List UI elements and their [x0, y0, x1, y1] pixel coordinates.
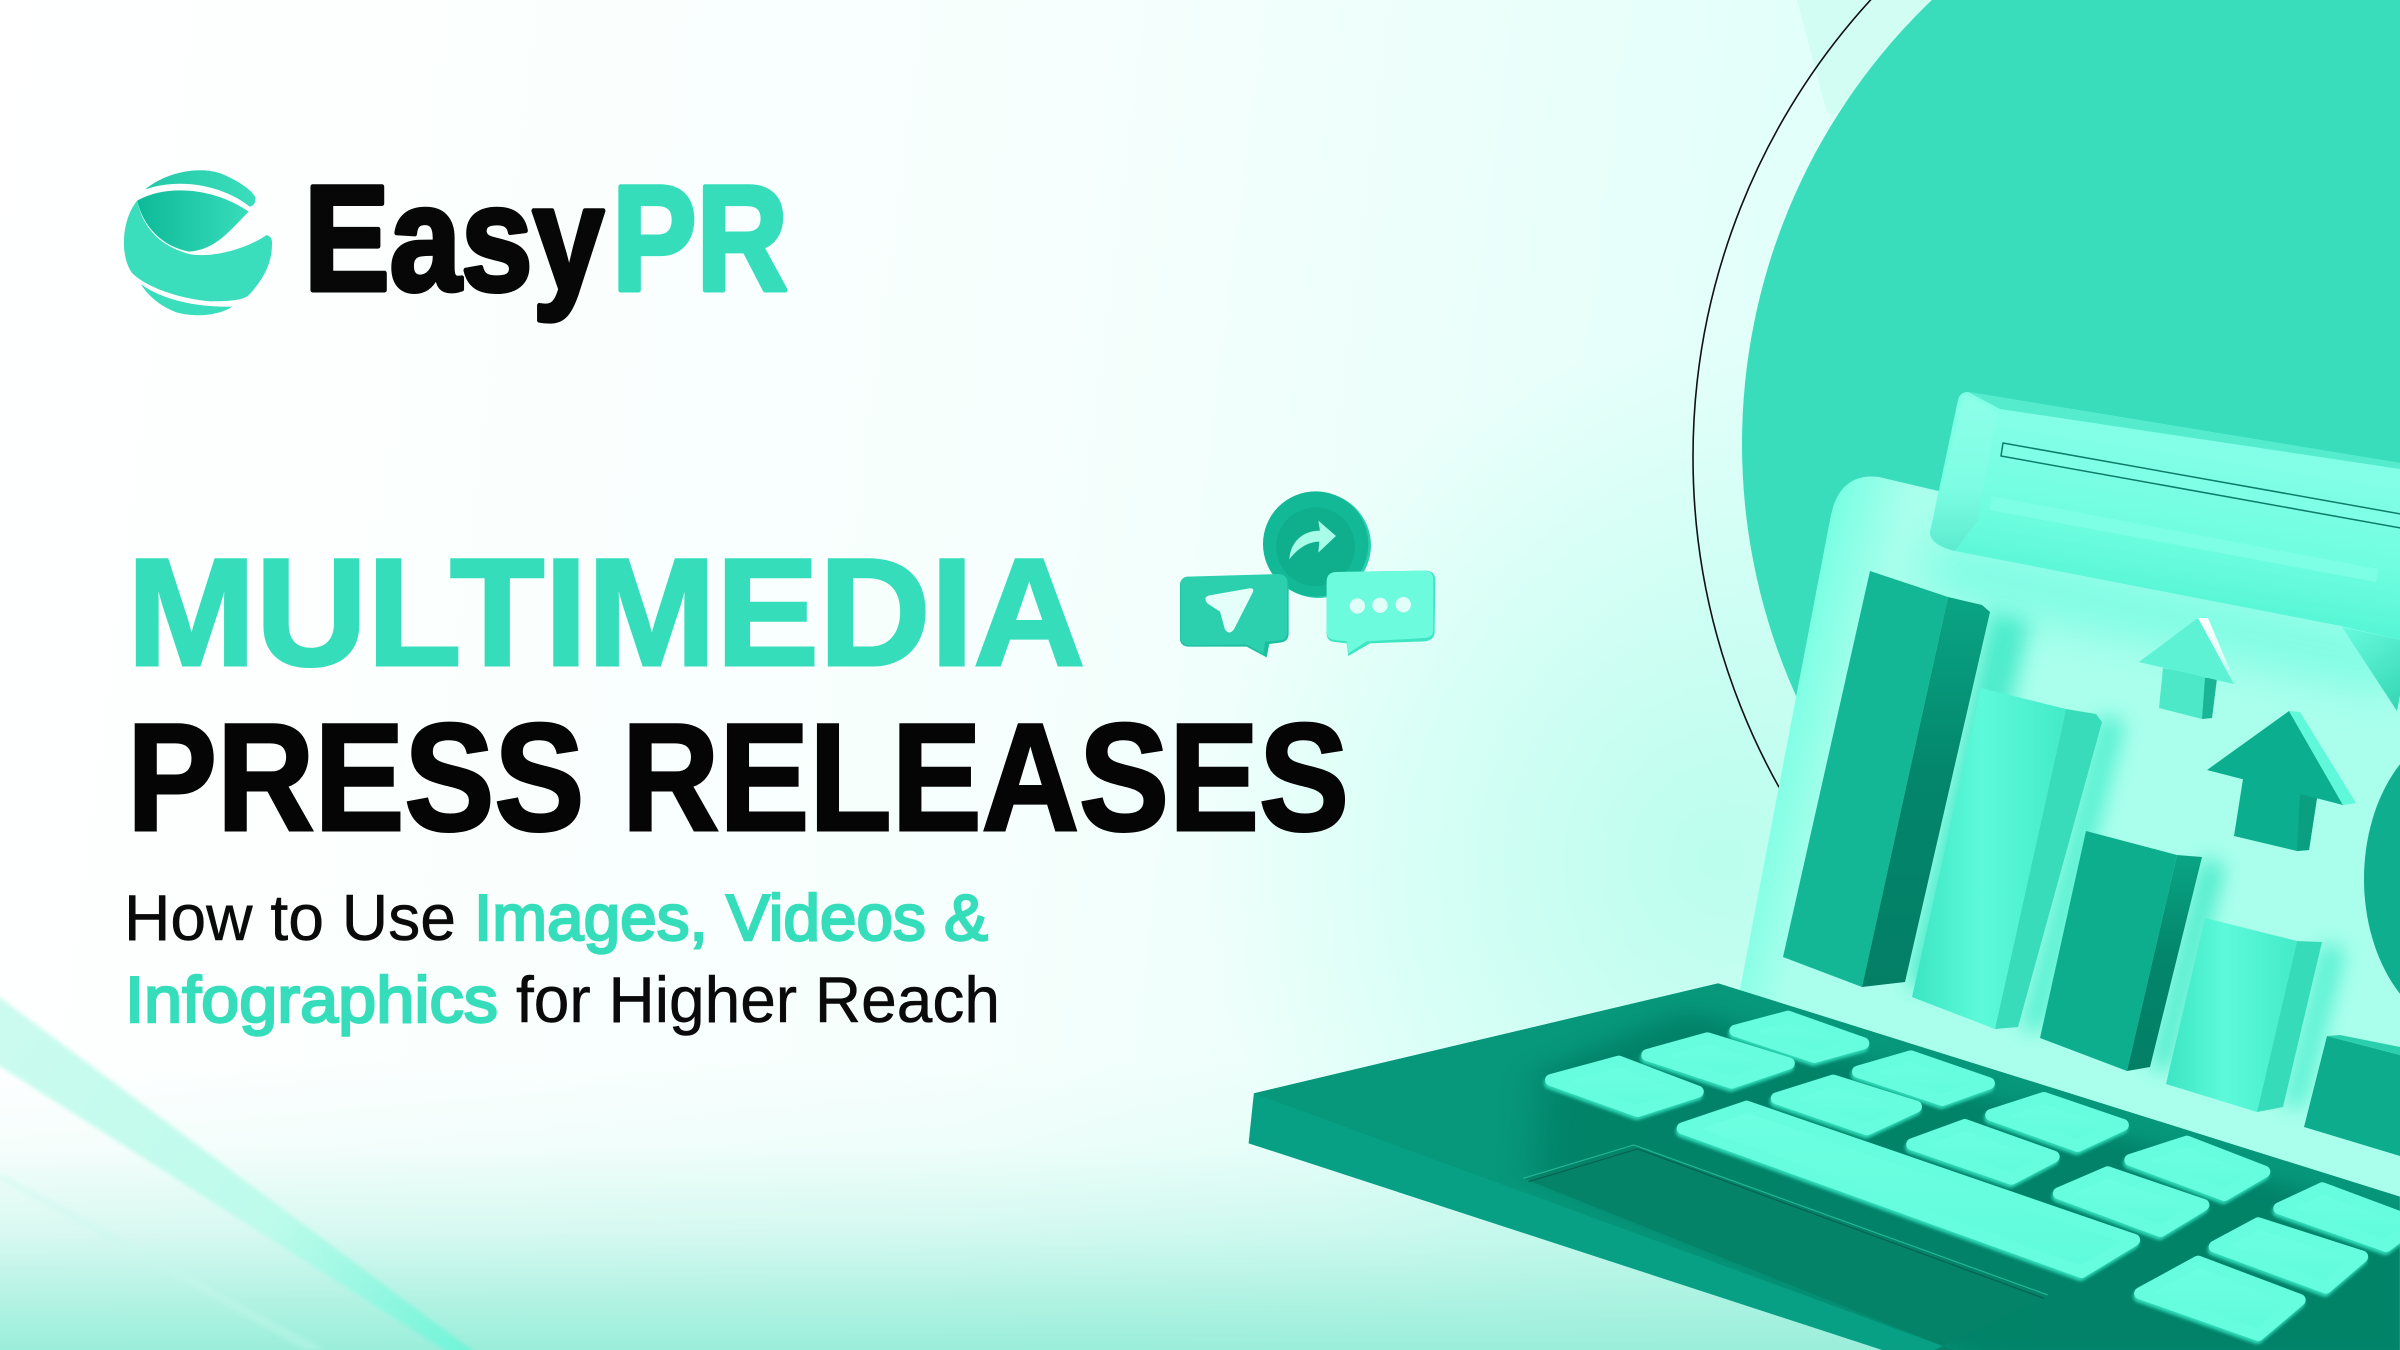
bar 1 [1783, 571, 1990, 987]
logo wordmark PR: PR [612, 154, 788, 322]
title line 2: PRESS RELEASES [127, 692, 1349, 863]
large teal circle [1742, 0, 2400, 1058]
subtitle: Images, Videos & [474, 881, 988, 954]
laptop screen [1738, 477, 2400, 1215]
trackpad [1523, 1145, 2048, 1350]
subtitle: How to Use [124, 881, 456, 954]
laptop illustration [1249, 392, 2400, 1350]
thin black arc [1693, 0, 2400, 1134]
social icons cluster [1180, 491, 1435, 657]
subtitle [124, 881, 1000, 1036]
title line 1: MULTIMEDIA [127, 527, 1085, 698]
icon: chat bubble [1327, 571, 1435, 656]
keyboard base [1249, 983, 2400, 1350]
logo [124, 154, 788, 322]
bar 5 [2304, 1035, 2400, 1156]
header card [1930, 392, 2400, 711]
keyboard keys [1551, 1017, 2400, 1335]
large up arrow [2207, 711, 2356, 851]
screen shadows [1907, 540, 2400, 1108]
small up arrow [2139, 618, 2236, 719]
bar 4 [2166, 918, 2322, 1112]
bar 2 [1912, 688, 2102, 1029]
bar 3 [2040, 831, 2202, 1071]
icon: send bubble [1180, 574, 1289, 657]
logo wordmark Easy: Easy [304, 154, 604, 322]
icon: share coin [1263, 491, 1371, 598]
subtitle: for Higher Reach [516, 963, 1000, 1036]
logo mark [124, 170, 272, 315]
dark circle on screen [2364, 725, 2400, 1033]
subtitle: Infographics [125, 963, 498, 1036]
